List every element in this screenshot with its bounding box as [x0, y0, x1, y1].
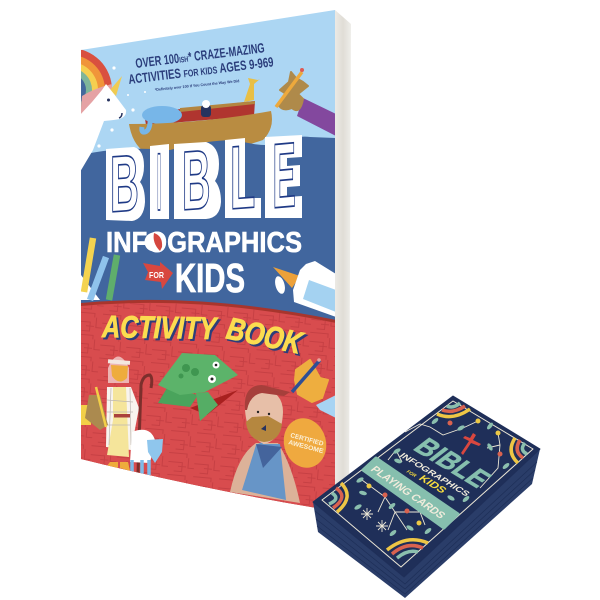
sky background [82, 10, 335, 153]
rainbow left [329, 483, 347, 512]
sheep [130, 430, 163, 475]
arrow: FOR: FOR [149, 270, 164, 280]
badge: certified awesome: CERTIFIED [289, 432, 324, 448]
card banner: PLAYING CARDS [368, 465, 448, 521]
bearded man [230, 385, 300, 503]
navy inner letters: B [182, 132, 211, 228]
skunk [201, 100, 211, 117]
crayons [80, 238, 117, 300]
ark cabin [144, 101, 255, 125]
deck edge lines [315, 462, 537, 594]
badge: certified awesome: AWESOME [287, 439, 325, 455]
rainbow right [511, 438, 527, 463]
navy inner letters [112, 142, 295, 213]
book page edge [335, 10, 351, 511]
unicorn [80, 76, 126, 172]
title: BIBLE [106, 135, 302, 221]
vines top [388, 421, 500, 488]
deck side [313, 396, 540, 598]
vines bottom [362, 480, 425, 530]
yellow berries [366, 418, 500, 526]
hand with pencil [276, 68, 336, 136]
navy inner letters: E [272, 123, 296, 228]
wave: blue sea [81, 137, 336, 330]
navy inner letters: B [110, 139, 139, 230]
ark hull [129, 111, 272, 150]
card title INFOGRAPHICS: INFOGRAPHICS [397, 451, 473, 498]
headline: over 100ish: OVER 100ISH* CRAZE-MAZING [135, 40, 265, 71]
white letter blocks [106, 135, 302, 221]
card border [322, 401, 533, 567]
ark [129, 78, 272, 155]
red maze panel [81, 300, 336, 520]
snowflakes [361, 508, 388, 532]
book cover [81, 10, 335, 508]
navy inner letters: I [157, 135, 161, 228]
product illustration [81, 10, 540, 598]
pie chart O [144, 232, 164, 252]
title: KIDS: KIDS [175, 255, 245, 301]
headline: over 100ish [128, 40, 274, 92]
hand with navy pencil [292, 358, 336, 418]
hand holding pencil [81, 387, 108, 430]
navy inner letters: L [230, 126, 255, 228]
headline: over 100ish: *Definitely over 100 If You Count the Way We Did [155, 79, 240, 92]
card face [313, 396, 540, 577]
arrow: FOR [143, 262, 173, 289]
rainbow bottom [387, 540, 428, 558]
shepherd [106, 356, 152, 473]
red berries [382, 420, 502, 514]
leaves [354, 417, 510, 537]
rainbow top [437, 403, 470, 417]
playing cards deck [313, 396, 540, 598]
glue bottle [273, 261, 336, 317]
headline: over 100ish: ACTIVITIES FOR KIDS AGES 9-969 [128, 54, 274, 87]
card title BIBLE: BIBLE [406, 434, 497, 493]
title: INFOGRAPHICS: INFOGRAPHICS [106, 227, 302, 259]
title: ACTIVITY BOOK: ACTIVITY [101, 309, 219, 346]
giraffe [244, 78, 260, 102]
origami frog [158, 353, 238, 421]
cross [461, 433, 481, 455]
elephant trunk [142, 116, 150, 132]
rainbow [81, 50, 112, 108]
badge: certified awesome [284, 418, 326, 468]
title: ACTIVITY BOOK [100, 315, 308, 356]
sparkles [97, 66, 146, 148]
card title FOR KIDS [404, 470, 449, 495]
card title FOR KIDS: KIDS [416, 474, 449, 495]
title: ACTIVITY BOOK: BOOK [224, 311, 307, 361]
card title FOR KIDS: FOR [404, 470, 418, 479]
elephant body [142, 106, 182, 124]
